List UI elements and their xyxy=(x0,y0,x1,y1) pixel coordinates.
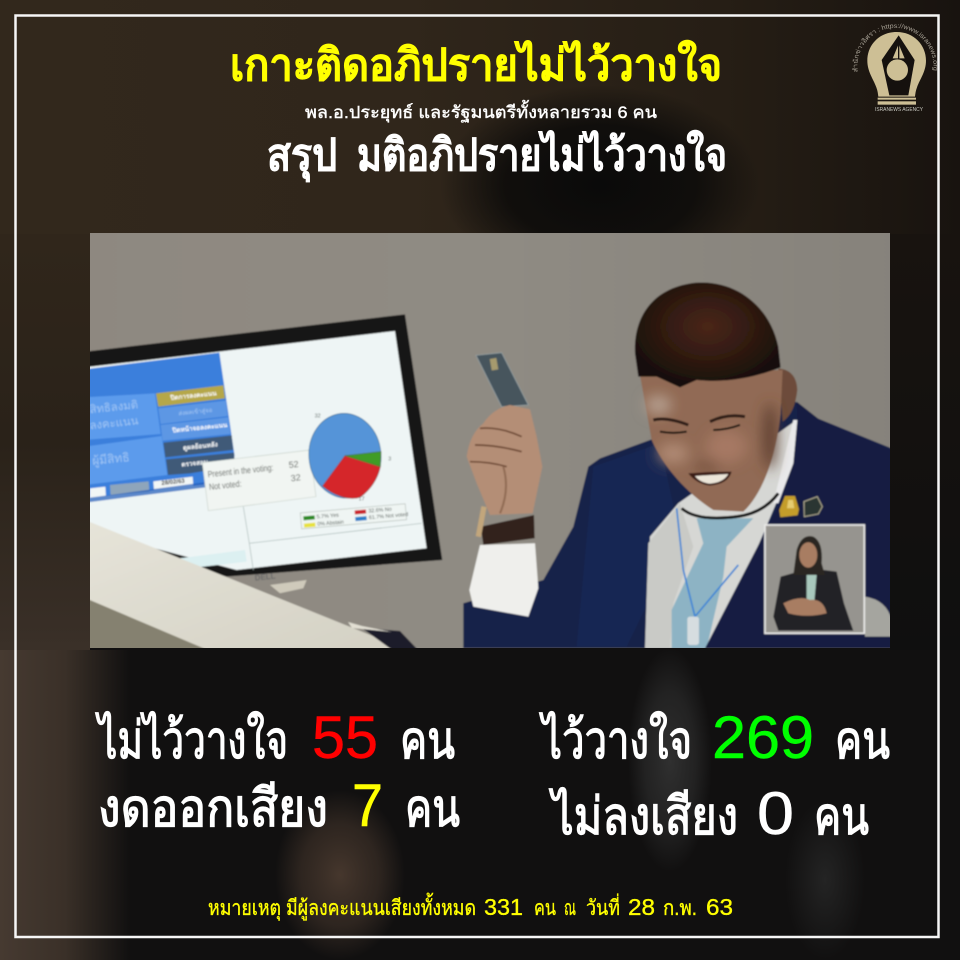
table object xyxy=(865,597,892,637)
result tooltip xyxy=(202,450,316,511)
monitor with voting screen: 32 xyxy=(290,472,301,483)
stat: confidence 269: 269 xyxy=(712,704,814,771)
logo curved url: สำนักข่าวอิศรา : https://www.isranews.org xyxy=(852,24,937,72)
monitor with voting screen: DELL xyxy=(254,571,276,583)
wristwatch xyxy=(481,515,535,545)
stat: not voted 0 xyxy=(549,780,869,847)
stat: abstain 7: งดออกเสียง xyxy=(98,780,328,838)
footnote: ณ xyxy=(564,897,576,920)
lanyard dark cord xyxy=(682,493,778,518)
smile xyxy=(688,472,732,486)
foreground white panel xyxy=(90,522,392,648)
stat: confidence 269 xyxy=(539,704,890,771)
brows and eyes xyxy=(653,416,745,425)
secondary title xyxy=(267,129,727,183)
monitor with voting screen: สิทธิลงมติ xyxy=(89,399,139,416)
footnote: 63 xyxy=(706,894,733,920)
stat: no confidence 55: ไม่ไว้วางใจ xyxy=(95,711,288,770)
pie labels: 17 xyxy=(359,497,365,503)
footnote: คน xyxy=(534,897,556,920)
monitor with voting screen: ส่งผลเข้าสู่จอ xyxy=(178,407,213,417)
monitor with voting screen xyxy=(85,314,442,593)
shirt cuff xyxy=(469,543,538,617)
monitor with voting screen: ตรวจสอบ xyxy=(181,459,208,469)
stat: no confidence 55: 55 xyxy=(312,704,378,771)
sign language inset xyxy=(765,525,864,633)
monitor with voting screen: Present in the voting: xyxy=(207,462,274,479)
tie xyxy=(672,518,753,648)
monitor with voting screen: 28/02/63 xyxy=(161,478,186,487)
footnote: หมายเหตุ มีผู้ลงคะแนนเสียงทั้งหมด xyxy=(208,893,476,921)
logo: Isranews Agency xyxy=(852,24,937,113)
logo bulb xyxy=(867,32,926,97)
man in suit xyxy=(463,282,892,648)
stat: not voted 0: คน xyxy=(814,788,869,846)
monitor with voting screen: ปิดหน้าจอลงคะแนน xyxy=(171,420,228,435)
footnote: วันที่ xyxy=(586,893,620,920)
footnote: 28 xyxy=(628,894,655,920)
stat: abstain 7 xyxy=(98,772,460,839)
monitor with voting screen: ปิดการลงคะแนน xyxy=(169,389,218,402)
jacket xyxy=(463,400,892,648)
stat: not voted 0: 0 xyxy=(757,780,794,847)
pie legend xyxy=(300,504,409,529)
blue lanyard xyxy=(677,508,738,617)
logo agency name: ISRANEWS AGENCY xyxy=(875,107,923,113)
footnote xyxy=(208,893,733,921)
pie labels xyxy=(315,413,391,503)
pie chart xyxy=(305,410,385,501)
subtitle: พล.อ.ประยุทธ์ และรัฐมนตรีทั้งหลายรวม 6 คน xyxy=(305,100,657,123)
ear xyxy=(778,368,797,422)
title: เกาะติดอภิปรายไม่ไว้วางใจ xyxy=(230,39,722,90)
screen blue panel xyxy=(85,353,235,498)
footnote: ก.พ. xyxy=(663,897,697,920)
pie legend: 32.6% No xyxy=(368,507,392,515)
face xyxy=(635,282,797,512)
photo: parliament voting xyxy=(85,228,895,653)
stat: abstain 7: คน xyxy=(405,780,460,838)
pie legend: 0% Abstain xyxy=(317,520,344,528)
secondary title: มติอภิปรายไม่ไว้วางใจ xyxy=(357,129,727,180)
pie legend: 61.7% Not voted xyxy=(369,512,409,521)
pie labels: 3 xyxy=(388,457,391,463)
jacket right lapel over shirt xyxy=(705,402,892,648)
pie labels: 32 xyxy=(315,413,321,419)
stat: abstain 7: 7 xyxy=(352,772,383,839)
stat: confidence 269: คน xyxy=(835,712,890,770)
pie legend: 5.7% Yes xyxy=(316,513,339,520)
monitor with voting screen: 52 xyxy=(288,459,299,470)
monitor with voting screen: ลงคะแนน xyxy=(89,415,139,432)
lapel pins xyxy=(779,496,822,517)
stat: no confidence 55 xyxy=(95,704,455,771)
monitor with voting screen: Not voted: xyxy=(208,479,242,492)
stat: no confidence 55: คน xyxy=(400,712,455,770)
stat: confidence 269: ไว้วางใจ xyxy=(539,711,692,770)
hair xyxy=(635,282,781,387)
footnote: 331 xyxy=(484,894,523,920)
stat: not voted 0: ไม่ลงเสียง xyxy=(549,787,738,846)
shirt xyxy=(647,420,797,648)
monitor with voting screen: ดูผลย้อนหลัง xyxy=(183,439,218,453)
raised hand with card xyxy=(467,353,542,515)
secondary title: สรุป xyxy=(267,131,337,183)
monitor with voting screen: ผู้มีสิทธิ xyxy=(92,450,130,469)
